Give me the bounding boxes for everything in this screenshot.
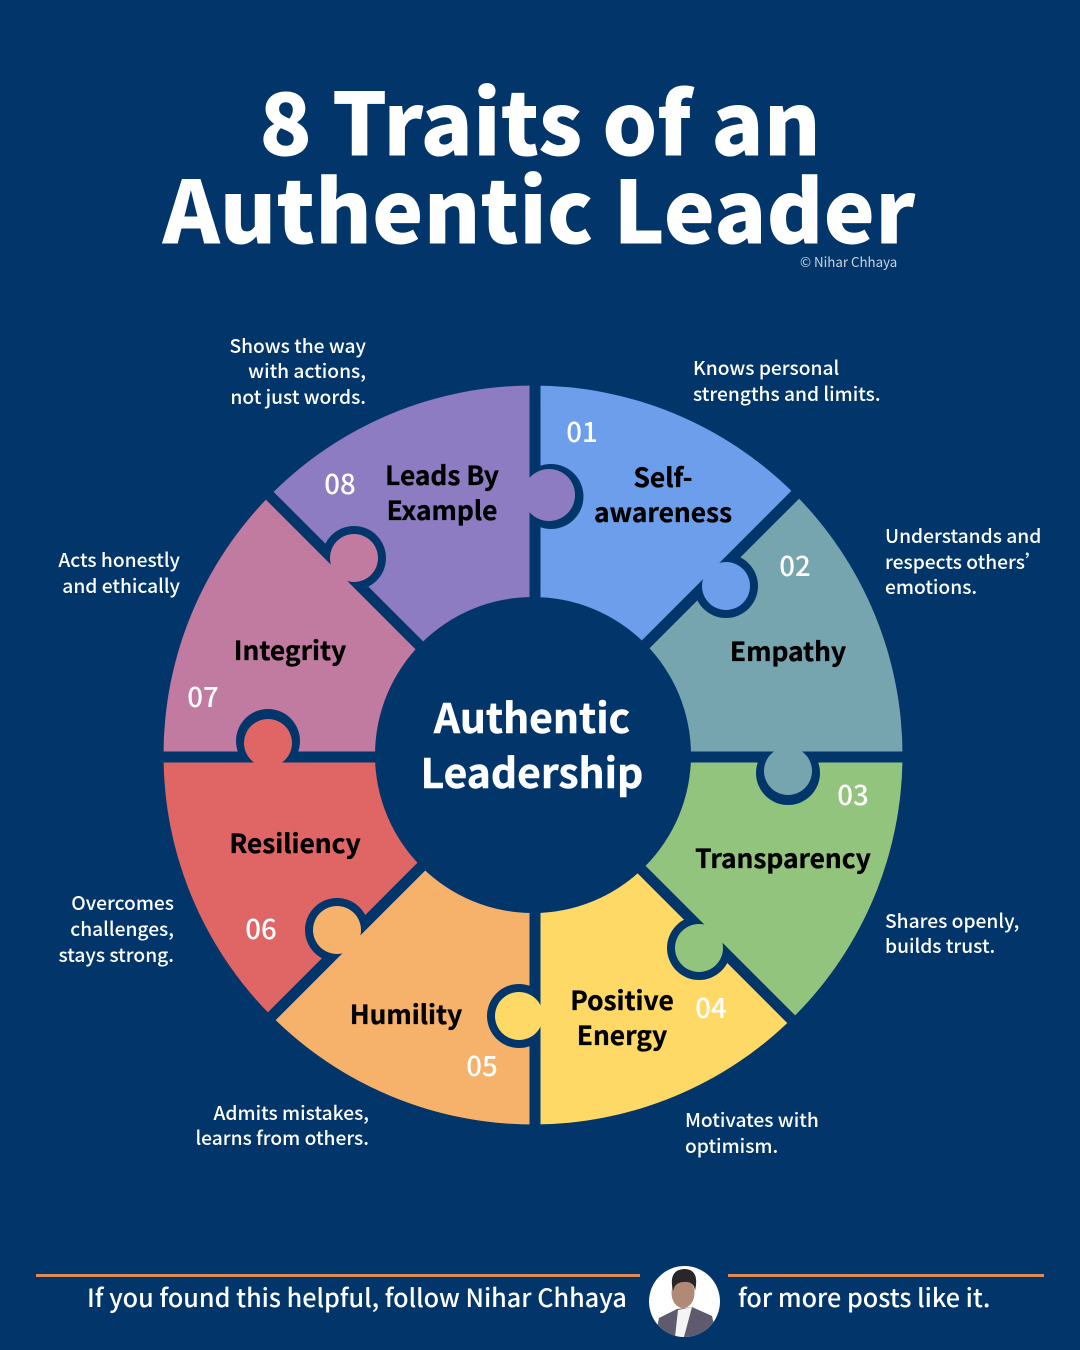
- title: Authentic Leader: [162, 144, 916, 268]
- description 08: not just words.: [230, 382, 366, 410]
- description 06: challenges,: [70, 914, 174, 942]
- description 06: stays strong.: [58, 940, 174, 968]
- copyright credit: © Nihar Chhaya: [800, 252, 897, 271]
- label integrity: Integrity: [234, 629, 346, 668]
- center hub: [375, 597, 691, 913]
- label resiliency: Resiliency: [229, 822, 361, 861]
- description 04: [685, 1105, 819, 1159]
- number 04: 04: [695, 986, 727, 1026]
- footer text left: If you found this helpful, follow Nihar Chhaya: [87, 1279, 627, 1315]
- segment 01 self-awareness: [540, 386, 792, 640]
- footer rule left: [36, 1274, 640, 1277]
- portrait icon: [649, 1266, 720, 1338]
- number 08: 08: [324, 462, 356, 502]
- title: 8 Traits of an: [259, 56, 821, 180]
- segment 06 resiliency: [164, 762, 418, 1012]
- description 08: [229, 331, 367, 410]
- description 03: Shares openly,: [885, 906, 1019, 934]
- number 02: 02: [779, 544, 811, 584]
- label self-awareness: awareness: [594, 491, 732, 530]
- description 07: Acts honestly: [58, 545, 181, 573]
- center label: Leadership: [421, 741, 643, 800]
- segment 05 humility: [276, 870, 530, 1124]
- description 01: strengths and limits.: [693, 379, 881, 407]
- segment 07 integrity: [164, 500, 416, 752]
- footer text right: for more posts like it.: [738, 1279, 990, 1315]
- segment 03 transparency: [646, 762, 902, 1016]
- title: [162, 56, 916, 268]
- description 07: [58, 545, 181, 599]
- label leads by example: Leads By: [385, 454, 499, 493]
- knobs: [244, 469, 812, 1040]
- description 02: emotions.: [885, 572, 977, 600]
- number 01: 01: [566, 410, 598, 450]
- description 05: [195, 1098, 369, 1151]
- description 02: Understands and: [885, 521, 1041, 549]
- segment 04 positive energy: [540, 873, 788, 1124]
- number 06: 06: [245, 907, 277, 947]
- description 07: and ethically: [62, 571, 181, 599]
- number 05: 05: [466, 1044, 498, 1084]
- label positive energy: [570, 979, 674, 1053]
- description 04: optimism.: [685, 1131, 778, 1159]
- segment 08 leads by example: [274, 386, 530, 642]
- description 03: builds trust.: [885, 931, 995, 959]
- description 04: Motivates with: [685, 1105, 819, 1133]
- label leads by example: Example: [387, 489, 497, 528]
- description 05: learns from others.: [195, 1123, 369, 1151]
- knob sockets: [236, 464, 820, 1048]
- footer rule right: [728, 1274, 1044, 1277]
- description 08: with actions,: [248, 356, 366, 384]
- label leads by example: [385, 454, 499, 528]
- label empathy: Empathy: [730, 630, 846, 669]
- label humility: Humility: [350, 993, 462, 1032]
- description 05: Admits mistakes,: [214, 1098, 369, 1126]
- center label: Authentic: [433, 686, 630, 745]
- label positive energy: Positive: [570, 979, 674, 1018]
- label positive energy: Energy: [577, 1014, 667, 1053]
- description 06: [58, 888, 174, 968]
- puzzle wheel: [164, 386, 902, 1336]
- center label: [421, 686, 643, 800]
- description 08: Shows the way: [229, 331, 367, 359]
- segment 02 empathy: [650, 498, 902, 752]
- description 01: Knows personal: [693, 353, 840, 381]
- number 07: 07: [187, 675, 219, 715]
- label transparency: Transparency: [695, 837, 871, 876]
- label self-awareness: Self-: [634, 456, 692, 495]
- number 03: 03: [837, 773, 869, 813]
- description 06: Overcomes: [71, 888, 174, 916]
- description 01: [693, 353, 881, 407]
- label self-awareness: [594, 456, 732, 530]
- description 03: [885, 906, 1019, 959]
- description 02: respects others’: [885, 547, 1044, 575]
- description 02: [885, 521, 1044, 600]
